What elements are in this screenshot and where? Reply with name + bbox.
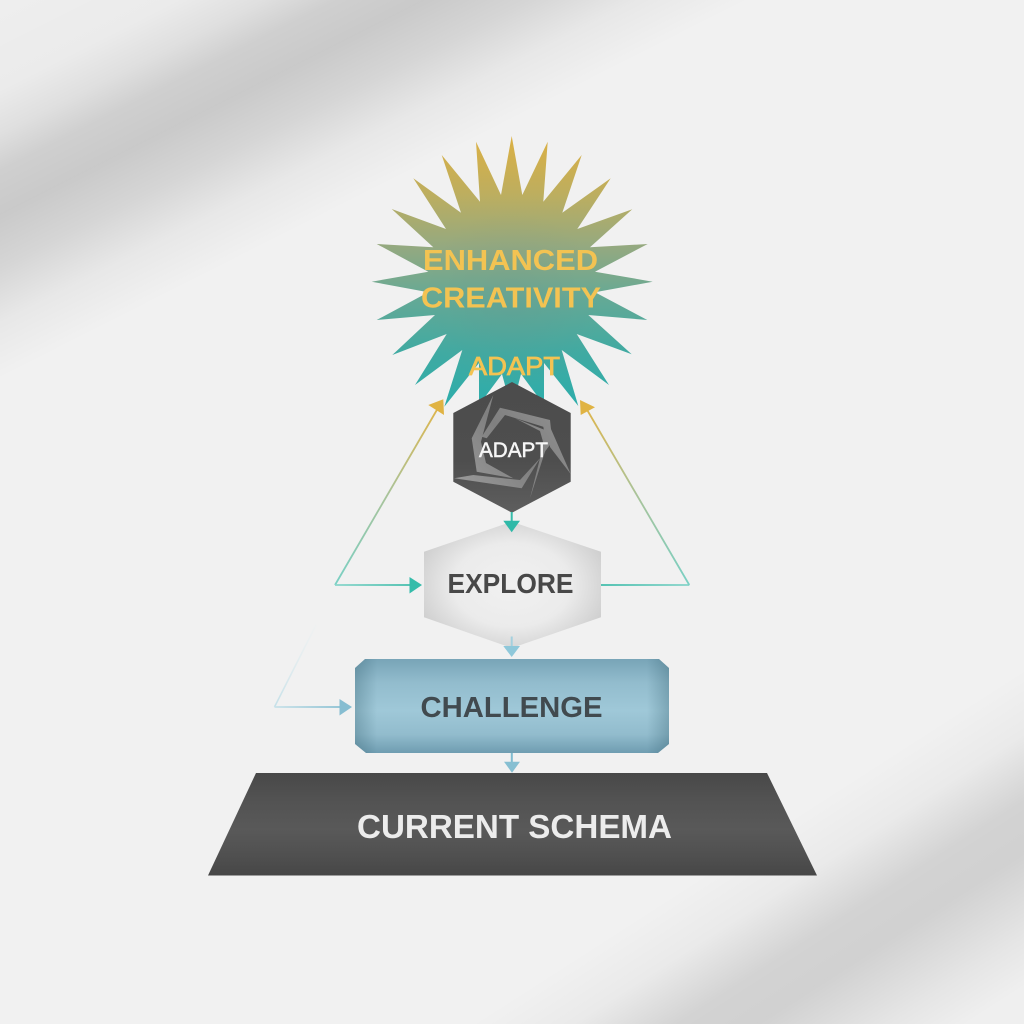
arrow: faint left feedback to challenge <box>274 625 352 716</box>
label: adapt yellow: ADAPT <box>469 351 560 381</box>
starburst: enhanced creativity <box>372 136 653 410</box>
icon: swirl <box>454 395 571 498</box>
node: adapt hexagon <box>453 382 571 513</box>
label: current schema: CURRENT SCHEMA <box>357 808 672 845</box>
heading: enhanced: ENHANCED <box>423 245 598 277</box>
node: current schema <box>208 773 817 876</box>
label: challenge: CHALLENGE <box>420 692 602 724</box>
arrow: explore to challenge <box>503 636 520 657</box>
node: explore hexagon <box>424 522 601 648</box>
arrow: adapt to explore <box>503 512 520 532</box>
heading: creativity: CREATIVITY <box>421 282 601 314</box>
label: explore: EXPLORE <box>448 568 574 599</box>
arrow: right feedback to starburst <box>580 400 689 585</box>
arrow: left feedback to starburst <box>335 399 444 594</box>
node: challenge <box>355 659 669 753</box>
arrow: challenge to schema <box>504 753 520 773</box>
label: adapt: ADAPT <box>479 439 548 462</box>
